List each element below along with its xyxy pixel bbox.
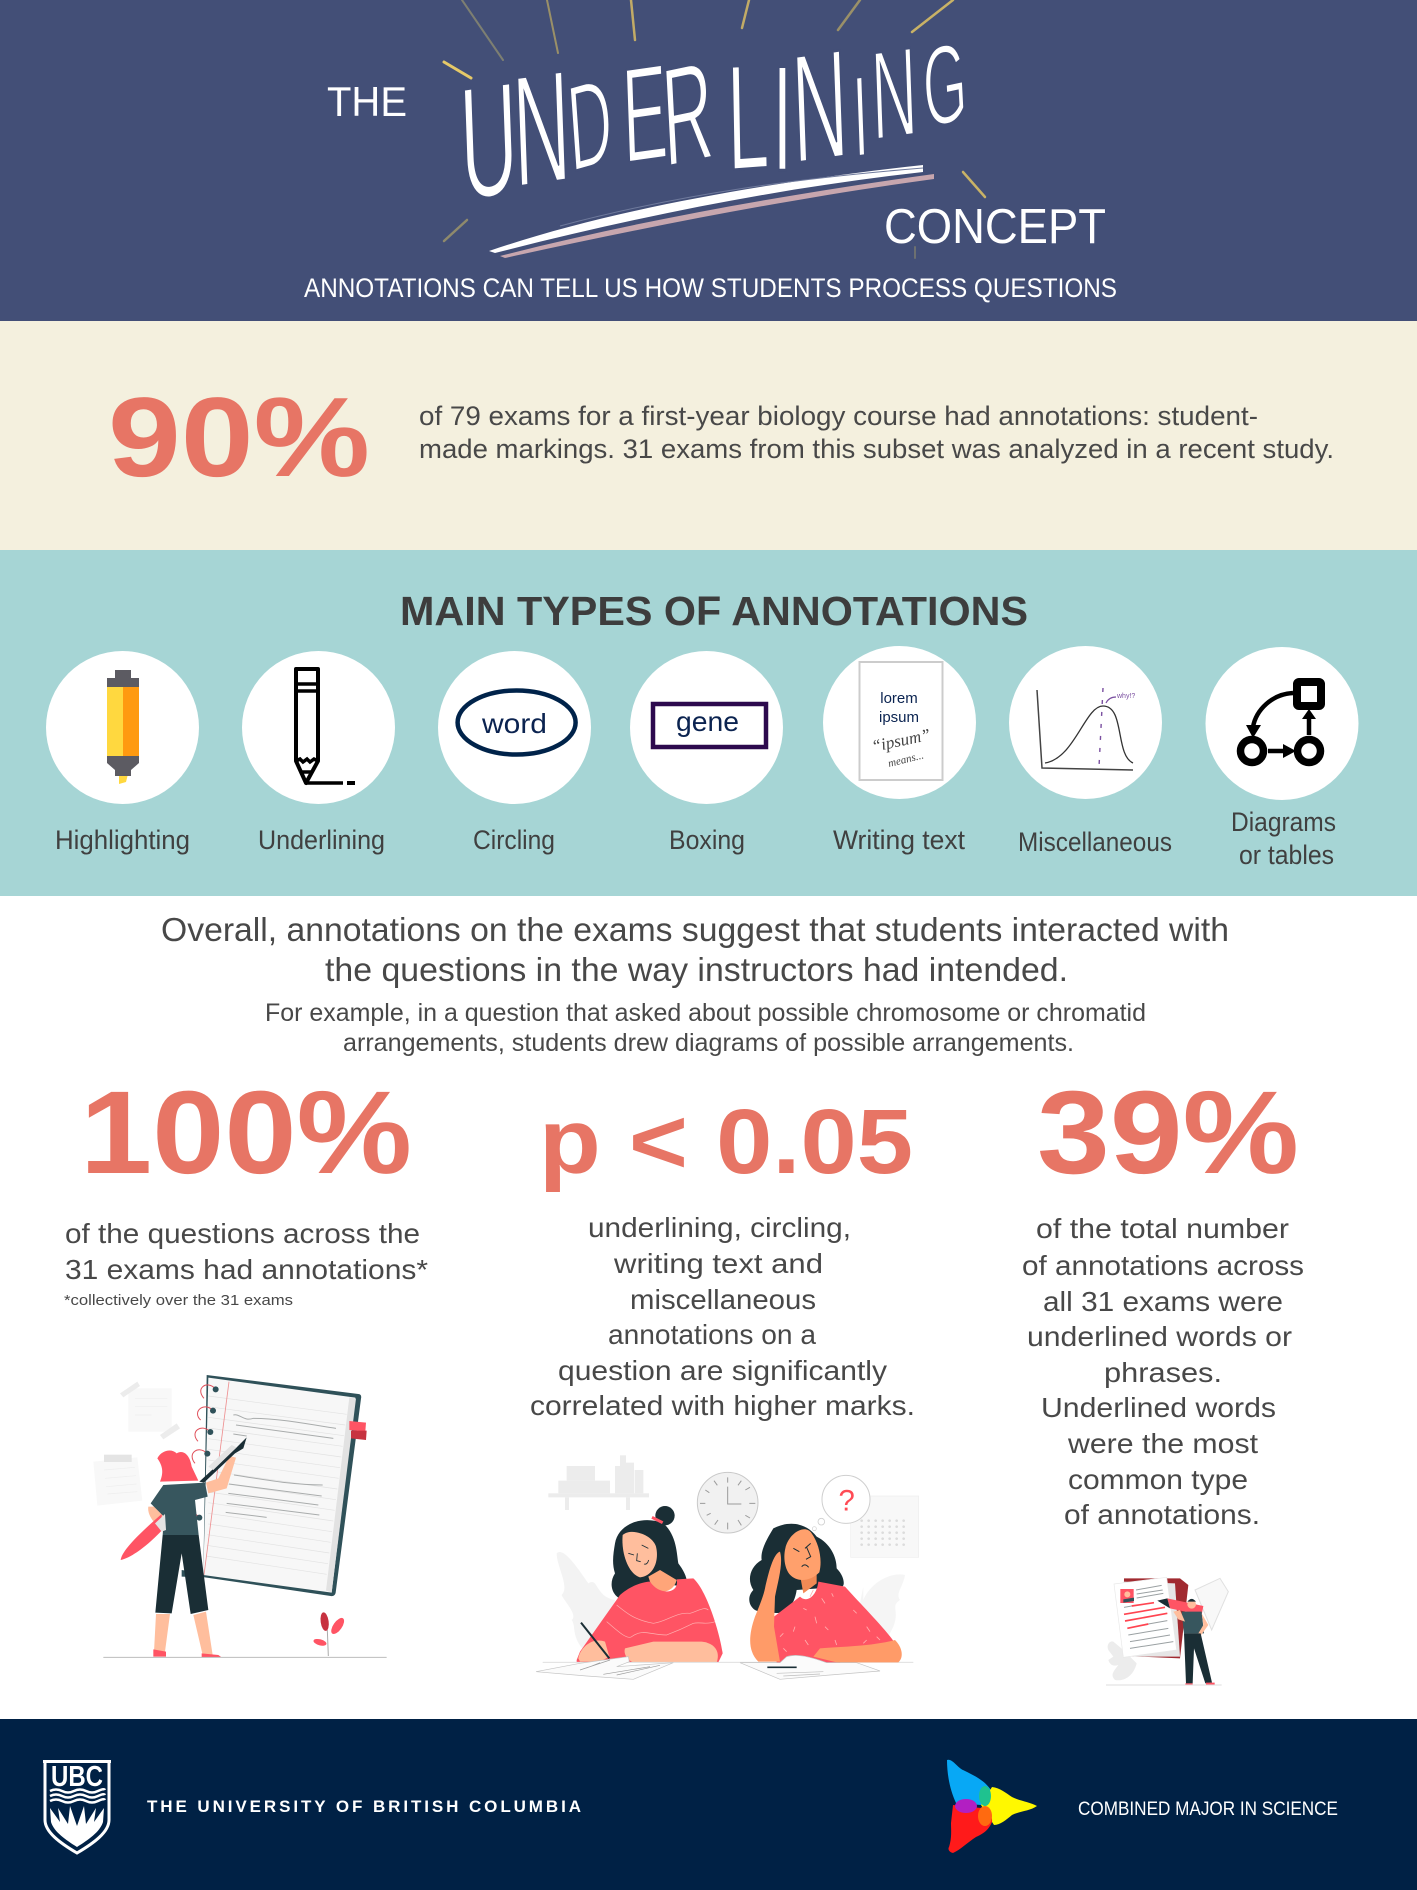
title: UNDERLINING: N [789,16,851,196]
text block: p value description: question are significantly [558,1355,887,1386]
big number 90%: 90% [108,374,370,500]
panel: footer [0,1719,1417,1890]
icon: written text page: means... [887,749,925,770]
big number 100%: 100% [80,1067,412,1199]
text block: 39% description: were the most [1067,1428,1258,1459]
title: UNDERLINING: R [658,32,717,197]
text: university name: THE UNIVERSITY OF BRITISH COLUMBIA [147,1797,581,1816]
text block: p value description: miscellaneous [630,1284,816,1315]
footnote: *collectively over the 31 exams [64,1292,293,1309]
panel: header [0,0,1417,321]
text block: overall finding: the questions in the way instructors had intended. [325,951,1068,988]
label: diagrams or tables: or tables [1239,840,1334,870]
title: THE: THE [327,78,407,125]
text block: 39% description: of annotations across [1022,1250,1304,1281]
icon: boxed word: gene [676,706,739,737]
statistic description [419,401,1334,464]
illustration: two students at a desk [536,1455,919,1679]
title: UNDERLINING: L [726,33,770,203]
text block: 39% description [1022,1213,1304,1530]
text block: 100% description: 31 exams had annotations* [65,1254,428,1285]
title: UNDERLINING: N [869,21,919,168]
text block: p value description: annotations on a [608,1319,816,1350]
text block: example [265,999,1146,1057]
text block: 39% description: of the total number [1036,1213,1289,1244]
illustration: student annotating giant notebook [93,1375,387,1657]
title: UNDERLINING: E [620,34,670,192]
text block: 39% description: underlined words or [1027,1321,1292,1352]
icon: written text page [823,646,976,799]
text block: 39% description: Underlined words [1041,1392,1276,1423]
logo: UBC shield: UBC [51,1761,103,1793]
label: highlighting: Highlighting [55,825,190,855]
section heading: MAIN TYPES OF ANNOTATIONS [400,588,1028,634]
text block: overall finding: Overall, annotations on the exams suggest that students interacted with [161,911,1229,948]
icon: written text page: “ipsum” [870,725,932,756]
text block: overall finding [161,911,1229,988]
title: UNDERLINING: U [457,47,521,234]
text block: 39% description: of annotations. [1064,1499,1260,1530]
icon: pencil underlining [242,651,395,804]
text block: 39% description: common type [1068,1464,1248,1495]
icon: circled word [438,651,591,804]
title: CONCEPT: CONCEPT [884,200,1106,254]
icon: highlighter [46,651,199,804]
text block: p value description: correlated with higher marks. [530,1390,915,1421]
illustration: two students at a desk: ? [839,1485,855,1518]
illustration: figure highlighting oversized document [1106,1577,1228,1685]
icon: annotated curve [1009,646,1162,799]
icon: written text page: lorem [880,690,918,707]
text block: p value description: underlining, circling, [588,1212,851,1243]
text block: p value description [530,1212,915,1421]
subtitle: ANNOTATIONS CAN TELL US HOW STUDENTS PROCESS QUESTIONS [304,273,1117,303]
title: UNDERLINING: N [510,38,573,221]
big number p less than 0.05: p < 0.05 [539,1091,913,1193]
statistic description: made markings. 31 exams from this subset was analyzed in a recent study. [419,434,1334,464]
icon: circled word: word [481,708,547,739]
title: UNDERLINING: G [920,17,970,152]
panel: 90 percent statistic [0,321,1417,550]
underline brush stroke [489,165,934,258]
text block: p value description: writing text and [613,1248,823,1279]
icon: diagram [1206,647,1358,800]
label: miscellaneous: Miscellaneous [1018,827,1172,857]
panel: main types of annotations [0,550,1417,896]
decorative burst rays [444,0,985,258]
label: boxing: Boxing [669,825,745,855]
text block: 100% description: of the questions across the [65,1218,420,1249]
icon: written text page: ipsum [879,709,919,726]
title: UNDERLINING: D [563,52,616,198]
title: UNDERLINING: I [772,36,793,203]
label: circling: Circling [473,825,555,855]
text block: example: arrangements, students drew diagrams of possible arrangements. [343,1029,1074,1057]
label: underlining: Underlining [258,825,385,855]
label: diagrams or tables [1231,807,1336,870]
big number 39%: 39% [1037,1067,1299,1199]
text: combined major in science: COMBINED MAJOR IN SCIENCE [1078,1798,1338,1820]
text block: 100% description [65,1218,428,1285]
text block: 39% description: all 31 exams were [1043,1286,1283,1317]
icon: boxed word [630,651,783,804]
label: diagrams or tables: Diagrams [1231,807,1336,837]
icon: annotated curve: why!? [1116,693,1135,700]
text block: example: For example, in a question that asked about possible chromosome or chromatid [265,999,1146,1027]
text block: 39% description: phrases. [1104,1357,1222,1388]
logo: UBC shield [43,1760,111,1853]
statistic description: of 79 exams for a first-year biology course had annotations: student- [419,401,1258,431]
title: UNDERLINING: I [850,53,871,182]
label: writing text: Writing text [833,825,965,855]
logo: combined major in science [947,1760,1037,1853]
